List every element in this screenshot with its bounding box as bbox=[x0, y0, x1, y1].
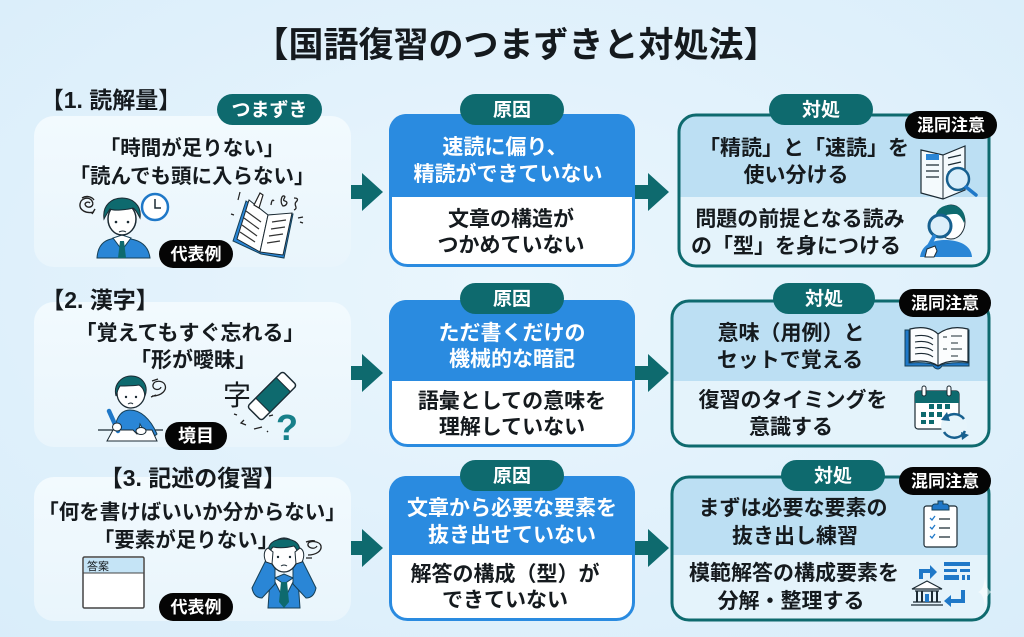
secondary cause text bbox=[410, 562, 600, 612]
stumbling card bbox=[34, 116, 351, 267]
label: representative example: 代表例 bbox=[170, 598, 222, 617]
stumbling quotes: 「覚えてもすぐ忘れる」 bbox=[76, 322, 304, 345]
remedy text 2: 意識する bbox=[749, 416, 833, 439]
arrow: row 2 to cause bbox=[351, 354, 383, 392]
secondary cause text bbox=[438, 207, 584, 257]
label: mix-up caution: 混同注意 bbox=[911, 472, 979, 491]
remedy text 2: 模範解答の構成要素を bbox=[689, 561, 899, 585]
icon: answer sheet bbox=[83, 557, 144, 608]
label: representative example bbox=[159, 593, 233, 621]
main cause text: 精読ができていない bbox=[414, 162, 602, 186]
remedy text 2 bbox=[689, 561, 899, 613]
arrow: row 3 to cause bbox=[351, 529, 383, 567]
remedy text 2: 分解・整理する bbox=[718, 590, 864, 613]
label: representative example: 代表例 bbox=[170, 245, 222, 264]
main cause text: ただ書くだけの bbox=[438, 322, 586, 345]
secondary cause text: 理解していない bbox=[439, 416, 585, 439]
panel: row 1 reading volume stumbling bbox=[34, 87, 351, 268]
panel: row 1 cause bbox=[389, 94, 635, 266]
icon: open book with scribbles bbox=[231, 192, 303, 258]
icon: calendar with refresh bbox=[915, 386, 969, 440]
main cause text: 機械的な暗記 bbox=[449, 348, 575, 371]
icon: man holding head bbox=[252, 538, 316, 608]
remedy text 1 bbox=[699, 137, 909, 187]
pill: cause bbox=[460, 94, 564, 125]
remedy text 1: まずは必要な要素の bbox=[698, 497, 888, 520]
main cause text bbox=[414, 136, 602, 186]
heading: reading volume: 【1. 読解量】 bbox=[41, 87, 181, 113]
remedy text 1: 意味（用例）と bbox=[718, 322, 864, 345]
panel: row 3 written answers stumbling bbox=[34, 465, 351, 621]
label: mix-up caution: 混同注意 bbox=[911, 294, 979, 313]
arrow: row 1 to remedy bbox=[635, 173, 669, 211]
main cause text: 文章から必要な要素を bbox=[407, 497, 617, 520]
secondary cause text: できていない bbox=[442, 589, 568, 612]
remedy text 2 bbox=[698, 388, 888, 439]
stumbling card bbox=[34, 302, 351, 447]
label: mix-up caution: 混同注意 bbox=[917, 116, 985, 135]
pill: stumbling bbox=[217, 94, 322, 125]
icon: question mark: ? bbox=[276, 407, 298, 448]
label: mix-up caution bbox=[905, 111, 997, 139]
remedy text 1: 「精読」と「速読」を bbox=[699, 137, 909, 160]
icon: studying child bbox=[98, 376, 163, 441]
main cause text bbox=[438, 322, 586, 371]
pill: stumbling: つまずき bbox=[231, 99, 308, 121]
secondary cause text: 語彙としての意味を bbox=[418, 390, 606, 413]
panel: row 2 cause bbox=[389, 283, 635, 446]
title: 【国語復習のつまずきと対処法】 bbox=[253, 26, 779, 65]
icon: swirl bbox=[151, 379, 165, 397]
main cause text: 抜き出せていない bbox=[428, 524, 596, 547]
eraser crumbs bbox=[234, 414, 273, 432]
main cause text bbox=[407, 497, 617, 547]
panel: row 3 cause bbox=[389, 460, 635, 620]
icon: person with magnifier bbox=[920, 205, 972, 257]
remedy text 2: 問題の前提となる読み bbox=[695, 208, 905, 231]
stumbling quotes bbox=[38, 501, 346, 552]
pill: cause: 原因 bbox=[493, 289, 531, 310]
icon: clock bbox=[142, 194, 168, 220]
pill: cause bbox=[460, 283, 564, 314]
label: representative example bbox=[159, 240, 233, 268]
remedy text 1: 抜き出し練習 bbox=[732, 525, 858, 548]
remedy text 1 bbox=[698, 497, 888, 548]
panel: row 3 remedy bbox=[672, 460, 992, 620]
secondary cause text: 文章の構造が bbox=[448, 207, 574, 231]
pill: remedy: 対処 bbox=[805, 288, 843, 310]
icon: structure breakdown bbox=[911, 562, 970, 607]
sparkle bbox=[978, 576, 992, 608]
label: boundary: 境目 bbox=[178, 426, 214, 446]
heading: written answer review: 【3. 記述の復習】 bbox=[100, 465, 286, 491]
remedy text 2 bbox=[691, 208, 905, 258]
arrow: row 2 to remedy bbox=[635, 354, 669, 392]
secondary cause text: つかめていない bbox=[438, 234, 584, 257]
icon: open book bbox=[905, 328, 969, 369]
pill: cause: 原因 bbox=[493, 100, 531, 121]
icon: answer sheet: 答案 bbox=[87, 559, 109, 573]
arrow: row 1 to cause bbox=[351, 173, 383, 211]
icon: book with magnifier bbox=[921, 146, 976, 199]
icon: clipboard checklist bbox=[924, 501, 957, 547]
remedy text 1: セットで覚える bbox=[717, 349, 863, 372]
pill: remedy: 対処 bbox=[802, 99, 840, 121]
label: mix-up caution bbox=[899, 467, 991, 495]
remedy text 2: 復習のタイミングを bbox=[698, 388, 888, 412]
stumbling quotes bbox=[76, 322, 304, 372]
panel: row 2 remedy bbox=[672, 283, 991, 446]
arrow: row 3 to remedy bbox=[635, 529, 669, 567]
stumbling quotes: 「要素が足りない」 bbox=[94, 528, 278, 552]
stumbling card bbox=[34, 477, 351, 621]
label: boundary bbox=[165, 422, 227, 450]
stumbling quotes: 「形が曖昧」 bbox=[130, 348, 256, 372]
icon: worried man bbox=[97, 198, 150, 258]
pill: remedy bbox=[781, 460, 885, 491]
remedy text 1 bbox=[717, 322, 864, 372]
icon: swirl bbox=[306, 541, 321, 558]
stumbling quotes: 「読んでも頭に入らない」 bbox=[70, 165, 314, 188]
icon: swirl bbox=[80, 197, 95, 214]
secondary cause text bbox=[418, 390, 606, 439]
remedy text 2: の「型」を身につける bbox=[691, 235, 901, 258]
heading: kanji: 【2. 漢字】 bbox=[41, 287, 159, 313]
stumbling quotes: 「何を書けばいいか分からない」 bbox=[38, 501, 346, 524]
pill: remedy bbox=[773, 283, 875, 314]
panel: row 2 kanji stumbling bbox=[34, 287, 351, 450]
pill: remedy: 対処 bbox=[814, 465, 852, 487]
pill: cause: 原因 bbox=[493, 466, 531, 487]
kanji character: 字 bbox=[223, 380, 251, 411]
pill: cause bbox=[460, 460, 564, 491]
main cause text: 速読に偏り、 bbox=[442, 136, 568, 159]
secondary cause text: 解答の構成（型）が bbox=[410, 562, 600, 586]
stumbling quotes: 「時間が足りない」 bbox=[100, 136, 284, 160]
label: mix-up caution bbox=[899, 289, 991, 317]
icon: eraser bbox=[247, 371, 297, 421]
stumbling quotes bbox=[70, 136, 314, 188]
panel: row 1 remedy bbox=[679, 94, 997, 266]
pill: remedy bbox=[769, 94, 873, 125]
remedy text 1: 使い分ける bbox=[744, 164, 848, 187]
